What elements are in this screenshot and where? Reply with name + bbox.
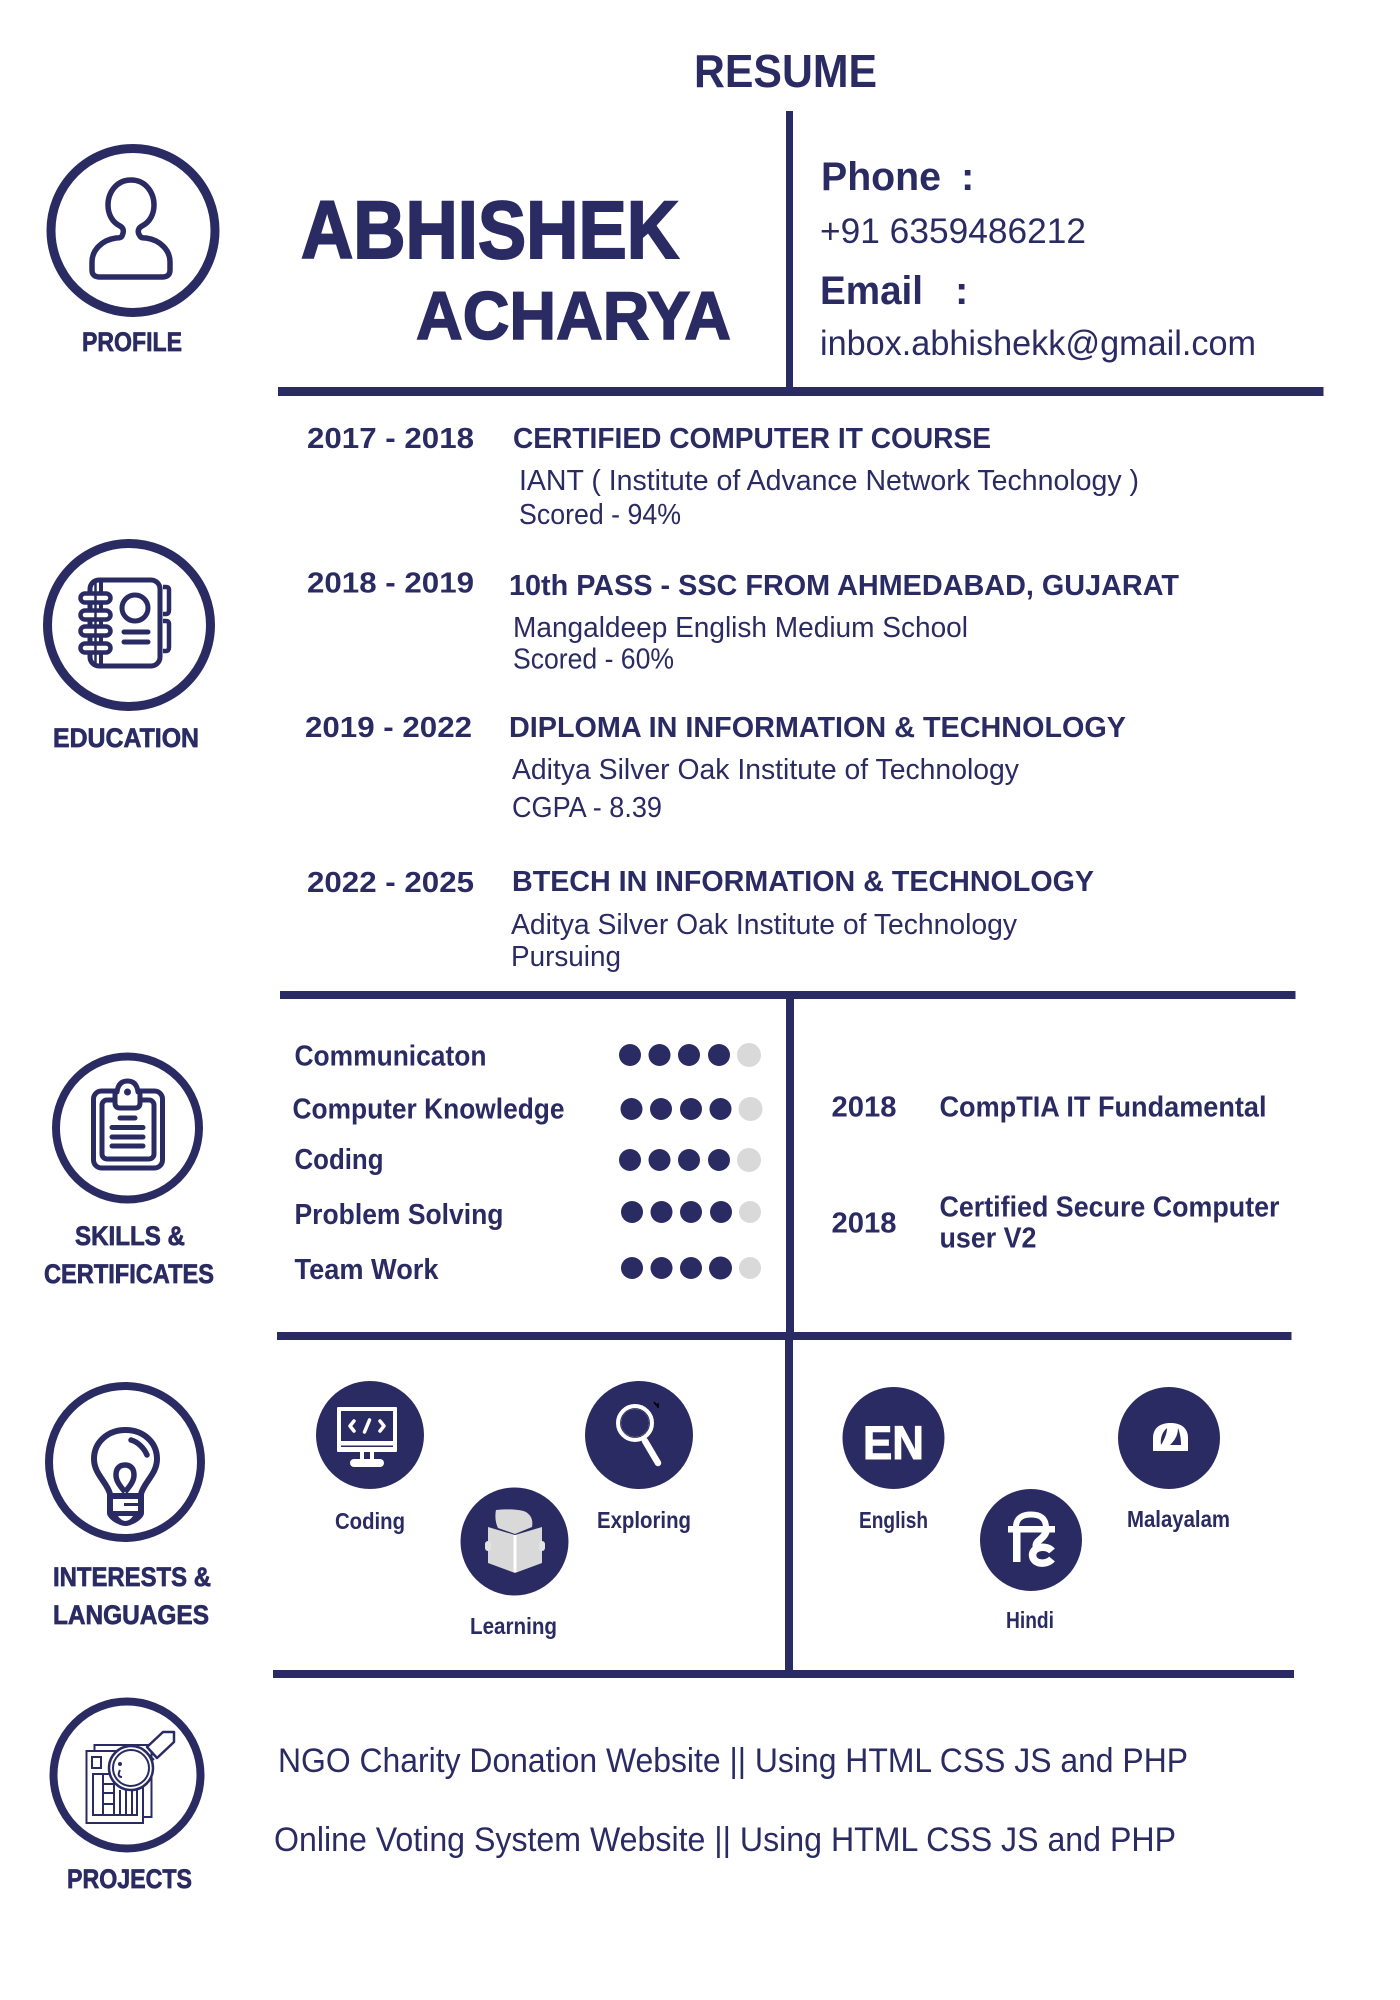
name (301, 185, 731, 354)
education entry 2022-2025: 2022 - 2025 (307, 867, 474, 899)
education entry 2017-2018: 2017 - 2018 (307, 423, 474, 455)
skill: team work (294, 1254, 761, 1286)
language: malayalam (1118, 1387, 1230, 1532)
education entry 2017-2018: IANT ( Institute of Advance Network Technology ) (519, 465, 1139, 497)
panel: certificates (832, 1092, 1280, 1254)
icon: light bulb (49, 1386, 201, 1538)
interest: exploring: Exploring (597, 1507, 691, 1533)
label: skills and certificates (44, 1221, 214, 1289)
label: profile: PROFILE (82, 327, 182, 357)
education entry 2019-2022: 2019 - 2022 (305, 712, 472, 744)
contact details: Email (820, 269, 923, 313)
education entry 2018-2019 (307, 568, 1179, 676)
education entry 2017-2018 (307, 423, 1139, 531)
panel: education (305, 423, 1179, 973)
skill: coding (294, 1144, 761, 1176)
label: interests and languages: LANGUAGES (53, 1600, 209, 1630)
contact details (820, 155, 1256, 363)
contact details: : (955, 269, 968, 313)
interest: learning (460, 1488, 568, 1639)
label: projects: PROJECTS (67, 1864, 192, 1894)
panel: skills (292, 1040, 762, 1286)
certificate: secure computer user: Certified Secure Computer (940, 1192, 1280, 1224)
certificate: secure computer user (832, 1192, 1280, 1254)
interest: coding: Coding (335, 1508, 405, 1534)
panel: profile sidebar (51, 148, 215, 357)
name: ACHARYA (416, 278, 731, 354)
language: hindi (980, 1489, 1082, 1633)
skill: communication (294, 1040, 761, 1072)
education entry 2022-2025: BTECH IN INFORMATION & TECHNOLOGY (512, 866, 1094, 898)
education entry 2022-2025: Pursuing (511, 941, 621, 973)
skill: computer knowledge (292, 1094, 762, 1126)
icon: person (51, 148, 215, 312)
language: malayalam: Malayalam (1127, 1506, 1230, 1532)
interest: exploring (585, 1381, 693, 1533)
label: skills and certificates: SKILLS & (75, 1221, 185, 1251)
contact details: inbox.abhishekk@gmail.com (820, 324, 1256, 363)
education entry 2018-2019: Mangaldeep English Medium School (513, 612, 968, 644)
certificate: secure computer user: 2018 (832, 1208, 896, 1240)
interest: coding (316, 1381, 424, 1534)
panel: projects: Online Voting System Website || Using HTML CSS JS and PHP (274, 1821, 1176, 1859)
language: english: EN (863, 1416, 924, 1469)
panel: skills sidebar (44, 1056, 214, 1289)
language: english: English (859, 1507, 928, 1533)
language: english (842, 1387, 944, 1533)
education entry 2019-2022 (305, 712, 1126, 824)
panel: languages (842, 1387, 1230, 1633)
contact details: +91 6359486212 (820, 212, 1086, 251)
skill: coding: Coding (294, 1144, 384, 1176)
education entry 2022-2025 (307, 866, 1094, 973)
education entry 2018-2019: 2018 - 2019 (307, 568, 474, 600)
skill: problem solving (294, 1199, 761, 1231)
icon: clipboard (56, 1056, 199, 1200)
certificate: CompTIA: 2018 (832, 1092, 896, 1124)
title: RESUME (694, 45, 877, 97)
language: hindi: Hindi (1006, 1607, 1054, 1633)
label: interests and languages: INTERESTS & (53, 1562, 211, 1592)
panel: education sidebar (48, 544, 210, 753)
education entry 2017-2018: CERTIFIED COMPUTER IT COURSE (513, 423, 991, 455)
education entry 2018-2019: Scored - 60% (513, 644, 674, 676)
panel: interests (316, 1381, 693, 1639)
contact details: Phone (821, 155, 941, 199)
interest: learning: Learning (470, 1613, 557, 1639)
label: education: EDUCATION (53, 723, 199, 753)
name: ABHISHEK (301, 185, 679, 276)
icon: document with magnifier (54, 1702, 200, 1848)
panel: projects (274, 1742, 1188, 1859)
contact details: : (961, 155, 974, 199)
panel: interests sidebar (49, 1386, 211, 1630)
education entry 2017-2018: Scored - 94% (519, 499, 681, 531)
education entry 2022-2025: Aditya Silver Oak Institute of Technology (511, 909, 1017, 941)
education entry 2019-2022: CGPA - 8.39 (512, 792, 662, 824)
skill: communication: Communicaton (294, 1040, 486, 1072)
education entry 2018-2019: 10th PASS - SSC FROM AHMEDABAD, GUJARAT (509, 570, 1179, 602)
panel: projects sidebar (54, 1702, 200, 1894)
skill: team work: Team Work (294, 1254, 439, 1286)
label: interests and languages (53, 1562, 211, 1630)
education entry 2019-2022: DIPLOMA IN INFORMATION & TECHNOLOGY (509, 712, 1126, 744)
icon: notebook (48, 544, 210, 706)
skill: problem solving: Problem Solving (294, 1199, 504, 1231)
education entry 2019-2022: Aditya Silver Oak Institute of Technology (512, 754, 1019, 786)
skill: computer knowledge: Computer Knowledge (292, 1094, 564, 1126)
certificate: secure computer user: user V2 (940, 1222, 1036, 1254)
panel: projects: NGO Charity Donation Website || Using HTML CSS JS and PHP (278, 1742, 1188, 1780)
label: skills and certificates: CERTIFICATES (44, 1259, 214, 1289)
certificate: CompTIA: CompTIA IT Fundamental (940, 1092, 1266, 1124)
